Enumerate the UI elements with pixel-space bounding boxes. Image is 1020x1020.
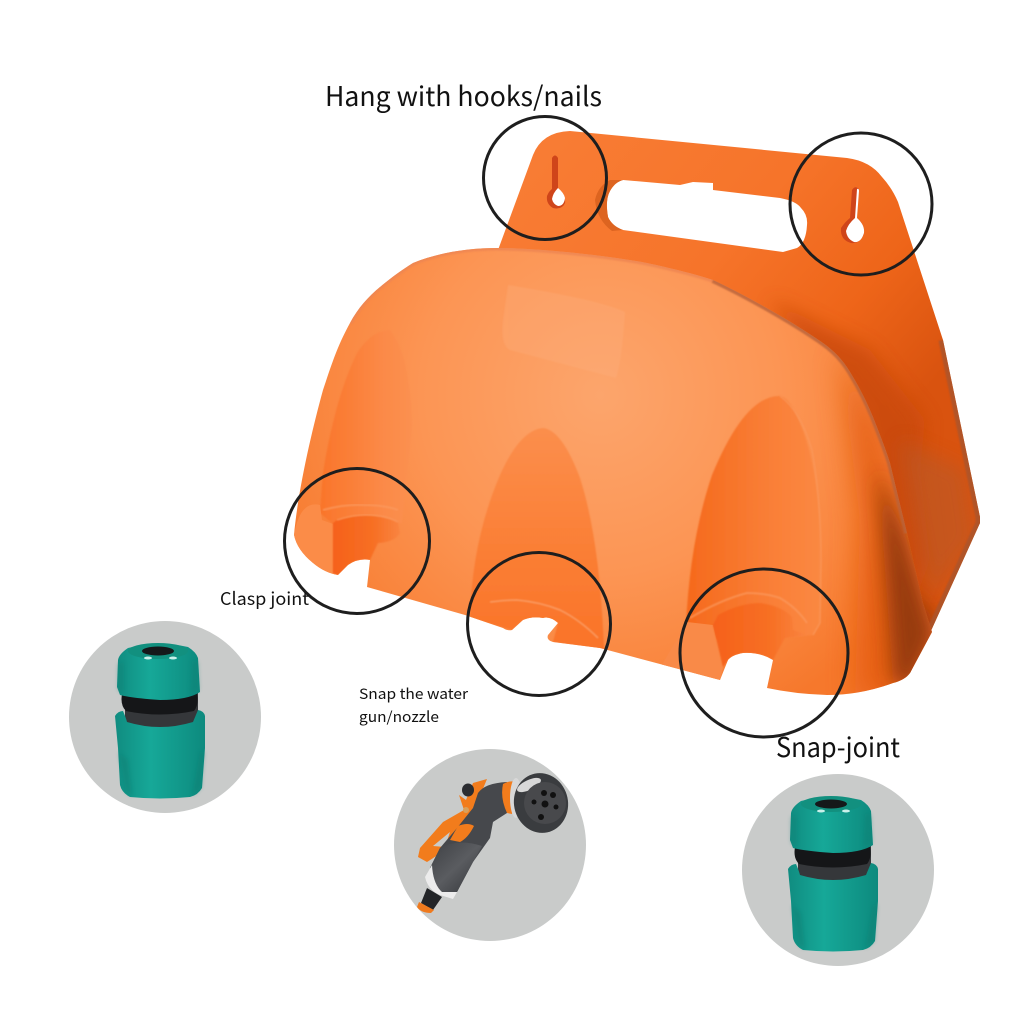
recess: left [320,342,374,522]
left socket [294,504,400,575]
icon: hose connector [115,643,205,798]
plate shading [770,300,980,680]
callout ring: clasp joint [284,468,430,614]
main dome body [294,248,932,695]
callout ring: right keyhole [790,133,932,275]
keyhole right [841,187,864,243]
photo circle: clasp connector [69,621,261,813]
callout ring: left keyhole [484,116,606,240]
photo circle: spray gun nozzle [394,749,586,941]
icon: hose connector [788,796,878,952]
callout ring: snap-joint [680,569,848,737]
label: snap the water gun/nozzle: Snap the water [359,683,468,704]
right socket [660,593,807,680]
centre socket ridge [490,600,598,638]
dome top rim highlight [350,248,713,323]
handle inner shadow [595,180,623,231]
recess: centre [470,428,604,650]
recess: right [686,396,821,640]
back plate with handle and keyholes [498,131,980,690]
recess: right rim highlight [780,396,821,635]
label: snap-joint: Snap-joint [776,726,900,765]
heading: hang with hooks/nails: Hang with hooks/nails [325,75,602,114]
icon: spray gun [417,768,574,913]
label: clasp joint: Clasp joint [220,586,309,611]
faint label plate [503,286,624,360]
callout ring: nozzle snap [468,552,610,696]
product: orange wall-mounted hose holder [294,131,980,700]
photo circle: snap connector [742,774,934,966]
dome right side shading [840,350,935,700]
keyhole left [547,156,565,208]
label: snap the water gun/nozzle: gun/nozzle [359,706,439,727]
